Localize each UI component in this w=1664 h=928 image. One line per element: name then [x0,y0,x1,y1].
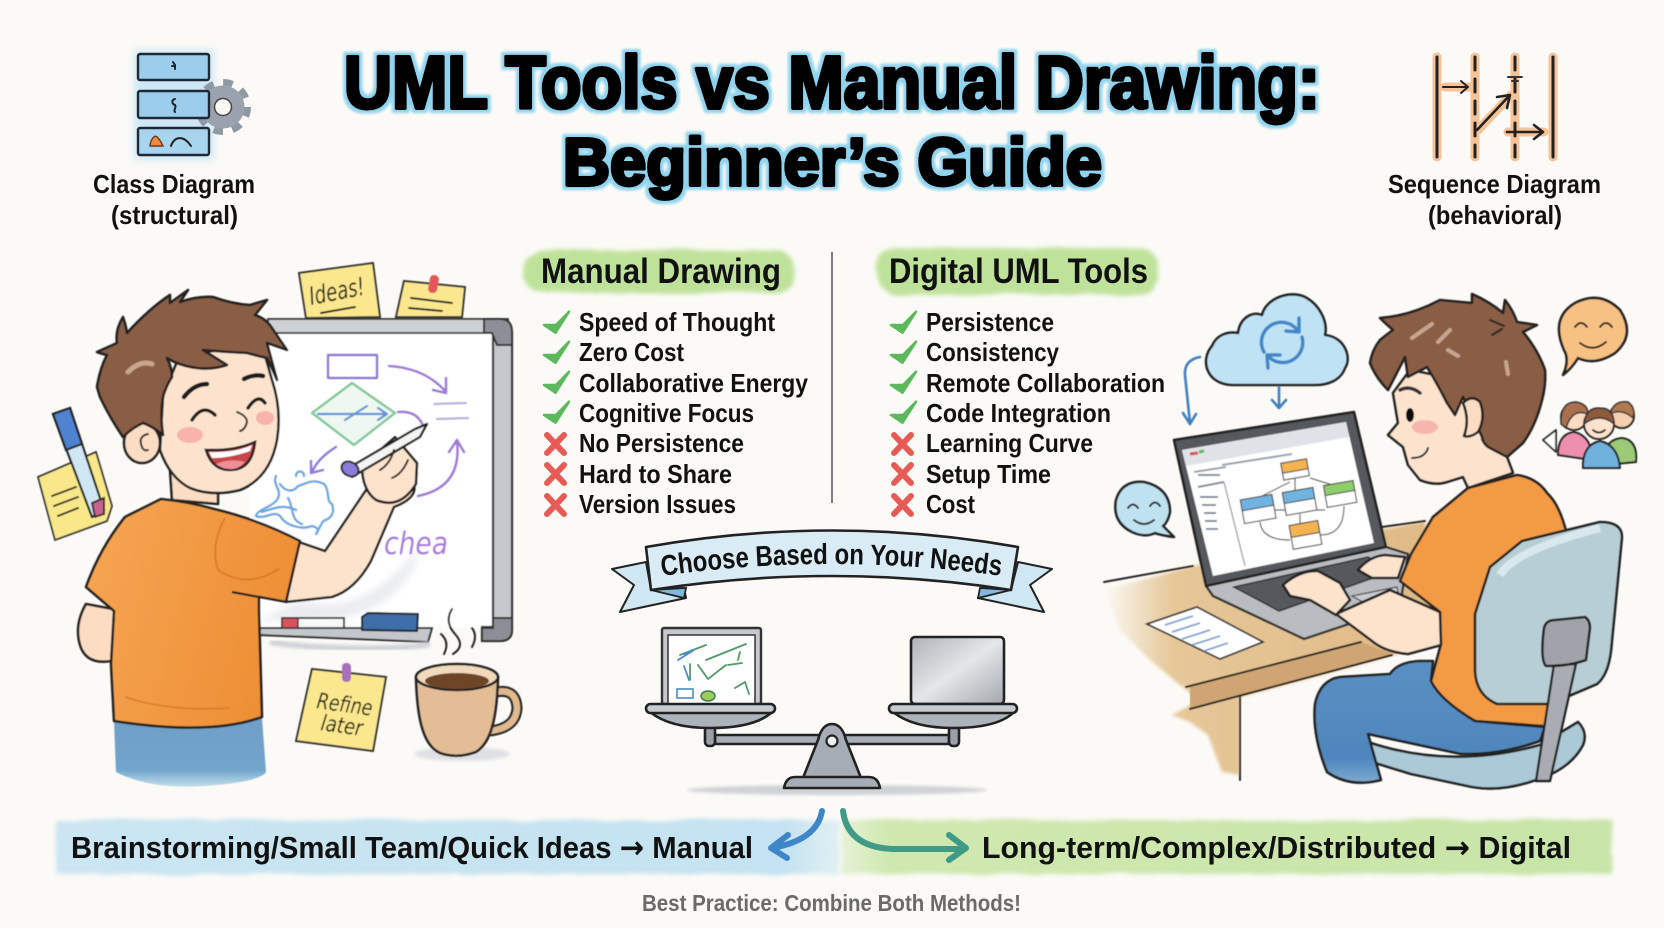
marker tray [259,613,432,648]
band: manual recommendation: Brainstorming/Small Team/Quick Ideas → Manual [71,830,753,866]
list: digital UML tools: Persistence [926,307,1054,337]
list: digital UML tools: Consistency [926,337,1059,367]
list: digital UML tools: Code Integration [926,398,1111,428]
title: Beginner’s Guide [563,125,1102,200]
sync arrows [1183,357,1286,424]
scale beam [715,735,949,744]
arrow: to digital [843,811,966,860]
paper [1147,607,1263,659]
whiteboard tablet on left pan [662,628,761,704]
label: class diagram [93,169,255,230]
team of people icon [1543,402,1636,468]
boy: arm [1336,590,1445,654]
emoji bubble: blue [1115,482,1174,537]
desk [1104,521,1445,780]
sticky note: Refine later: Refine [315,689,374,722]
coffee mug [414,609,517,761]
list: manual drawing: Zero Cost [579,337,684,367]
boy: raised arm [286,470,415,602]
list: digital UML tools: Setup Time [926,459,1051,489]
handwritten scribble: chea [384,526,448,562]
right pan [889,704,1017,728]
list: digital UML tools: Learning Curve [926,428,1093,458]
icon: class diagram [134,50,247,160]
list: manual drawing: Collaborative Energy [579,368,808,398]
sticky note: Ideas!: Ideas! [307,272,367,311]
band: manual recommendation [56,820,840,874]
label: sequence diagram: Sequence Diagram [1388,169,1601,199]
balance scale [646,628,1017,795]
list: digital UML tools: Remote Collaboration [926,368,1165,398]
icon: sequence diagram [1437,57,1553,157]
boy: neck [170,470,218,504]
emoji bubble: orange [1559,298,1627,375]
sticky note: Refine later: later [319,711,366,742]
list: manual drawing: Version Issues [579,489,736,519]
panel: whiteboard scene with boy [38,263,517,787]
boy: head [1370,294,1545,488]
boy: jeans [114,718,266,787]
banner: choose based on your needs [611,529,1053,613]
boy: head [97,290,287,493]
column divider [831,252,833,503]
heading: digital UML tools: Digital UML Tools [889,252,1148,291]
cloud with sync icon [1206,294,1348,385]
list: digital UML tools [891,307,1165,519]
left pan [646,704,775,728]
footer note: Best Practice: Combine Both Methods! [642,890,1021,916]
laptop [1174,412,1408,639]
scale fulcrum [803,724,861,778]
whiteboard sketches [256,355,468,534]
list: manual drawing: No Persistence [579,428,744,458]
heading: manual drawing: Manual Drawing [541,252,781,291]
boy: back arm [78,604,118,662]
chair seat [1366,722,1585,789]
office chair back [1475,522,1622,781]
label: sequence diagram [1388,169,1601,230]
sticky note with pen [38,408,112,540]
boy: t-shirt [86,499,300,728]
banner: choose based on your needs: Choose Based on Your Needs [661,543,1002,576]
boy: jeans [1314,661,1545,783]
boy: hand with marker [339,424,427,503]
sticky note: Refine later [296,663,386,751]
arrow: to manual [771,811,822,858]
band: digital recommendation [842,820,1612,874]
boy: t-shirt [1400,475,1567,727]
label: class diagram: Class Diagram [93,169,255,199]
scale shadow [687,785,987,795]
title: UML Tools vs Manual Drawing: [344,41,1320,124]
whiteboard [250,319,512,641]
band: digital recommendation: Long-term/Complex/Distributed → Digital [982,830,1571,866]
sticky note: pinned [396,274,465,317]
list: manual drawing: Cognitive Focus [579,398,754,428]
laptop screen UML diagram [1240,459,1357,549]
label: class diagram: (structural) [111,200,238,230]
boy: hands [1283,555,1405,615]
closed laptop on right pan [911,637,1004,704]
list: manual drawing: Speed of Thought [579,307,775,337]
sticky note: Ideas! [299,263,380,318]
title [344,41,1320,200]
list: digital UML tools: Cost [926,489,975,519]
label: sequence diagram: (behavioral) [1428,200,1562,230]
panel: laptop scene with boy [1104,294,1636,789]
list: manual drawing [544,307,808,519]
list: manual drawing: Hard to Share [579,459,732,489]
